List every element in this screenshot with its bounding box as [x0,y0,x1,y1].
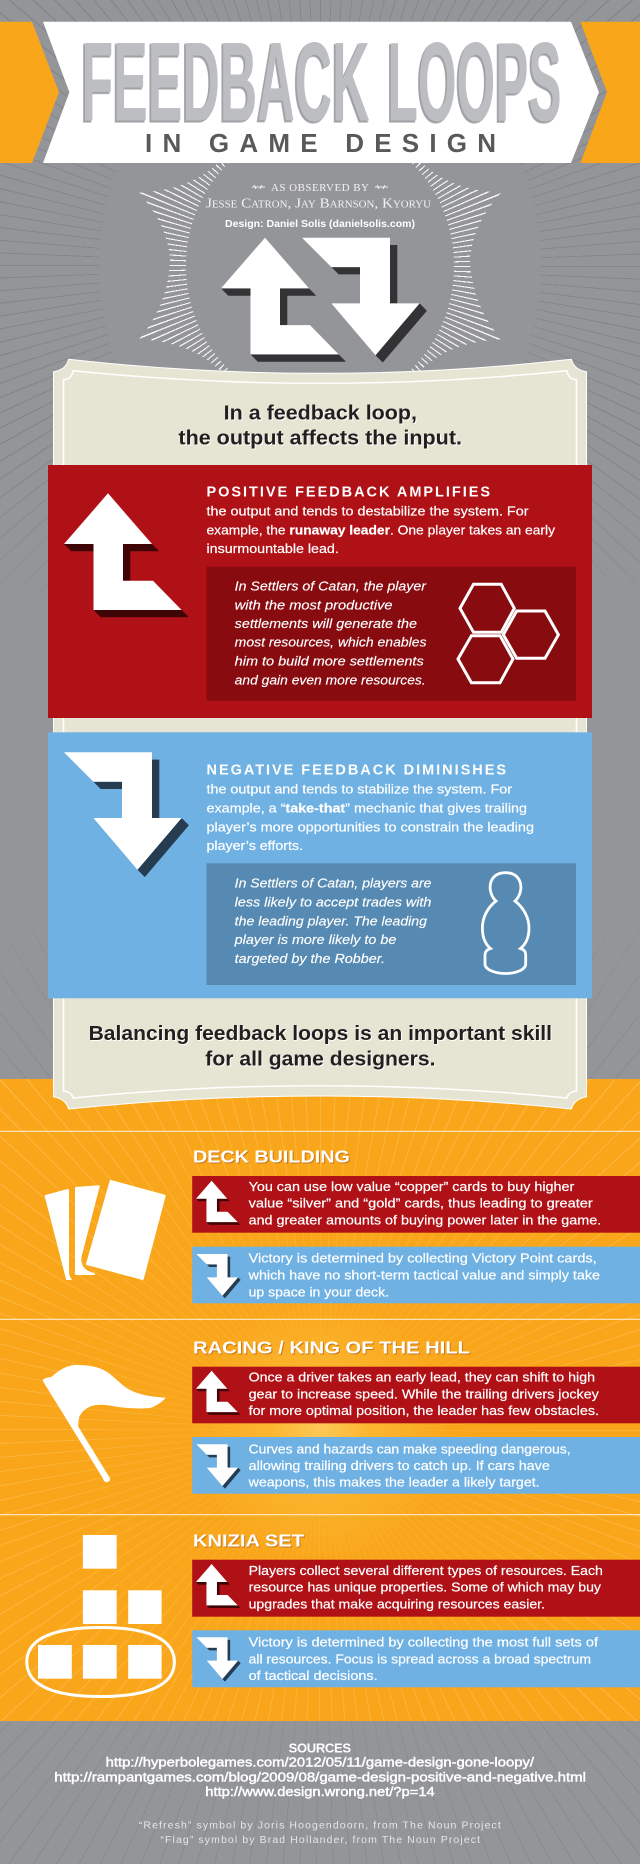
negative bar: up space in your deck. [249,1285,389,1299]
negative bar [192,1247,640,1303]
icon: down arrow [64,752,189,877]
heading: DECK BUILDING [193,1147,350,1167]
subtitle: IN GAME DESIGN [145,128,496,158]
background: grey rays lower [0,1022,640,1079]
example text: settlements will generate the [235,616,417,631]
closing statement: for all game designers. [205,1048,436,1070]
body text [206,504,556,556]
example text: less likely to accept trades with [235,895,431,910]
example text: the leading player. The leading [235,913,428,928]
panel: cream scroll [54,359,586,1109]
negative bar: of tactical decisions. [249,1669,378,1683]
title banner [0,20,640,163]
panel: negative feedback [48,732,592,998]
example box [206,863,576,985]
negative bar: allowing trailing drivers to catch up. If cars have [249,1459,550,1473]
sources [54,1740,586,1799]
positive bar: for more optimal position, the leader has few obstacles. [249,1404,599,1418]
example text [235,579,427,687]
credits [206,182,432,230]
designer: Design: Daniel Solis (danielsolis.com) [225,218,415,230]
panel: positive feedback [48,465,592,718]
icon credits [139,1819,501,1846]
ribbon left tail [0,22,59,163]
example text: In Settlers of Catan, the player [235,579,427,594]
positive bar: value “silver” and “gold” cards, thus leading to greater [249,1197,593,1211]
body text: player’s efforts. [206,838,303,853]
positive bar: Once a driver takes an early lead, they can shift to high [249,1371,595,1385]
intro statement: the output affects the input. [178,427,462,449]
heading: KNIZIA SET [193,1531,304,1551]
icon: flag [43,1365,166,1482]
negative bar: Curves and hazards can make speeding dangerous, [249,1442,571,1456]
background: plain centre behind icon [99,24,541,508]
intro statement: In a feedback loop, [224,402,417,424]
icon: refresh arrows [221,238,427,362]
body text: player’s more opportunities to constrain the leading [206,819,534,834]
section: knizia set [27,1531,640,1696]
body text: insurmountable lead. [206,541,339,556]
ribbon right tail [580,22,640,163]
background: orange section with rays [0,1079,640,1722]
example text: In Settlers of Catan, players are [235,876,431,891]
positive bar [192,1176,640,1233]
section: deck building [46,1147,640,1303]
background: grey rays upper [0,0,640,530]
negative bar: Victory is determined by collecting Victory Point cards, [249,1252,597,1266]
negative bar: which have no short-term tactical value and simply take [247,1269,600,1283]
body text: example, the runaway leader . One player takes an early [206,522,556,537]
example text: most resources, which enables [235,635,427,650]
example text: player is more likely to be [234,932,396,947]
negative bar: Victory is determined by collecting the most full sets of [249,1636,599,1650]
negative bar: weapons, this makes the leader a likely target. [247,1476,540,1490]
positive bar: and greater amounts of buying power later in the game. [249,1214,601,1228]
icon: cards [46,1181,165,1279]
negative bar: all resources. Focus is spread across a broad spectrum [249,1652,591,1666]
ornaments [252,185,388,189]
positive bar [192,1560,640,1617]
ribbon white centre [43,22,599,163]
heading: POSITIVE FEEDBACK AMPLIFIES [206,485,490,501]
example text: and gain even more resources. [235,672,426,687]
positive bar: upgrades that make acquiring resources easier. [249,1597,545,1611]
heading: NEGATIVE FEEDBACK DIMINISHES [206,762,506,778]
icon: hexes [458,584,558,683]
sources: http://www.design.wrong.net/?p=14 [205,1784,435,1799]
icon: up arrow [64,493,189,617]
intro statement [178,402,462,449]
sunburst: white ticks around icon [139,163,501,371]
positive bar [192,1367,640,1423]
example text: with the most productive [235,597,393,612]
observed by line: AS OBSERVED BY [271,182,369,194]
sources: http://hyperbolegames.com/2012/05/11/game-design-gone-loopy/ [106,1755,534,1770]
negative bar [192,1437,640,1494]
positive bar: gear to increase speed. While the trailing drivers jockey [249,1387,600,1401]
authors: Jesse Catron, Jay Barnson, Kyoryu [206,197,432,212]
example text: him to build more settlements [235,653,424,668]
positive bar: Players collect several different types of resources. Each [249,1564,603,1578]
closing statement: Balancing feedback loops is an important skill [89,1023,552,1045]
icon credits: “Refresh” symbol by Joris Hoogendoorn, from The Noun Project [139,1819,501,1831]
positive bar: resource has unique properties. Some of which may buy [249,1581,602,1595]
background: grey footer with rays [0,1721,640,1864]
section: racing [43,1337,640,1494]
example text [234,876,431,966]
body text: the output and tends to destabilize the system. For [206,504,529,519]
body text: the output and tends to stabilize the system. For [206,782,513,797]
divider lines [0,1131,640,1515]
negative bar [192,1630,640,1687]
heading: RACING / KING OF THE HILL [193,1337,470,1357]
closing statement [89,1023,552,1070]
sources: http://rampantgames.com/blog/2009/08/game-design-positive-and-negative.html [54,1769,586,1784]
icon: resource squares [27,1535,174,1696]
icon: pawn [482,873,529,974]
example text: targeted by the Robber. [235,951,385,966]
example box [206,567,576,701]
body text: example, a “ take-that ” mechanic that gives trailing [206,801,527,816]
positive bar: You can use low value “copper” cards to buy higher [249,1180,574,1194]
body text [206,782,534,853]
sources: SOURCES [289,1740,351,1755]
icon credits: “Flag” symbol by Brad Hollander, from The Noun Project [160,1834,480,1846]
